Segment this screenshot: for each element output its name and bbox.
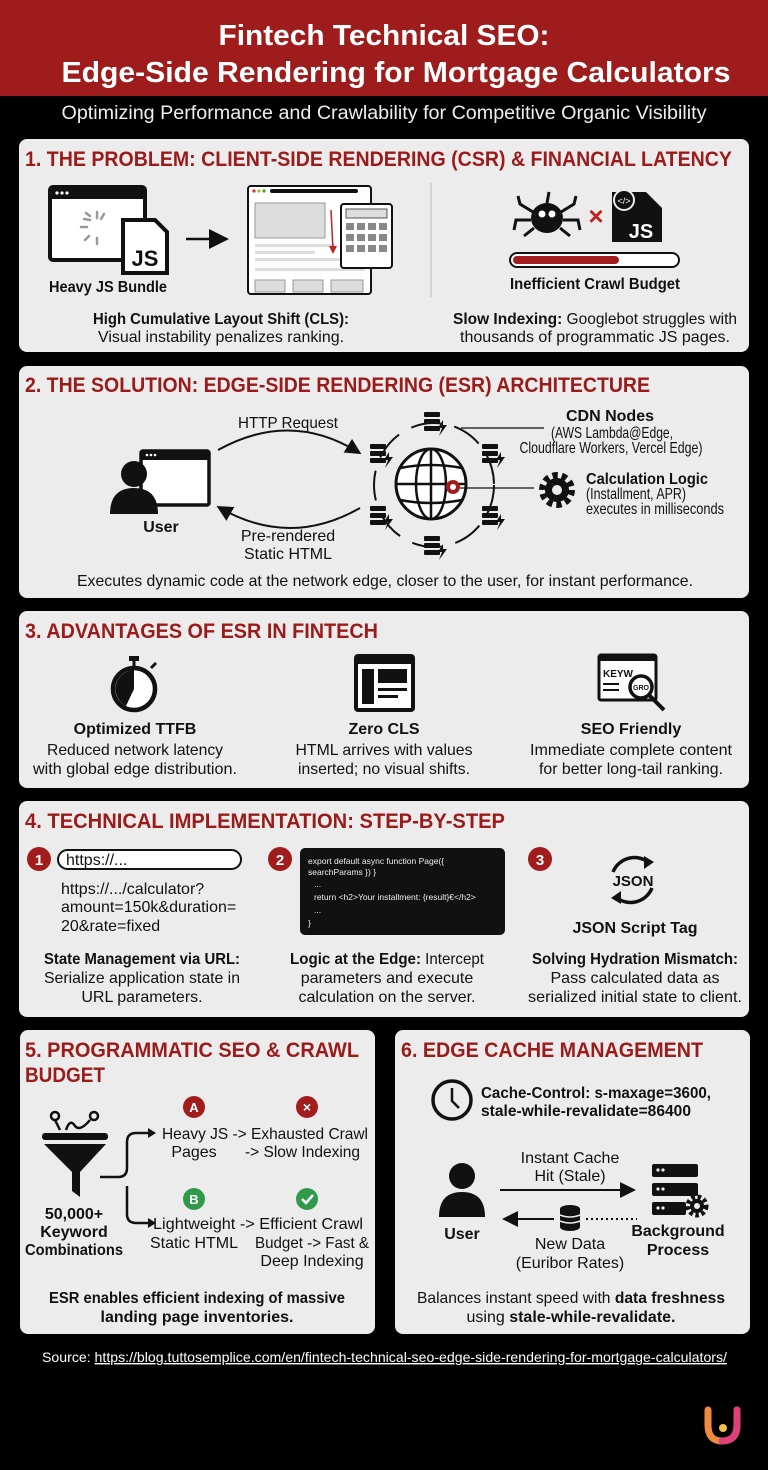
path a: -> Slow Indexing bbox=[245, 1144, 360, 1161]
advantage: ttfb: Reduced network latency bbox=[47, 742, 223, 759]
icon: spider x js: JS bbox=[629, 221, 653, 243]
caption 5: ESR enables efficient indexing of massive bbox=[49, 1290, 345, 1307]
caption 5: landing page inventories. bbox=[101, 1309, 293, 1326]
step 3: JSON Script Tag bbox=[572, 920, 698, 937]
panel: advantages bbox=[19, 611, 749, 788]
caption: solution: Executes dynamic code at the network edge, closer to the user, for instant performance. bbox=[77, 573, 693, 590]
cache-control header: stale-while-revalidate=86400 bbox=[481, 1103, 691, 1120]
title: Edge-Side Rendering for Mortgage Calculators bbox=[62, 57, 730, 89]
subtitle: Optimizing Performance and Crawlability for Competitive Organic Visibility bbox=[62, 103, 707, 124]
advantage: zero cls: HTML arrives with values bbox=[296, 742, 472, 759]
arrow: instant cache hit bbox=[500, 1150, 632, 1190]
title bbox=[62, 20, 730, 89]
caption: CLS bbox=[93, 311, 349, 346]
advantage: seo friendly: Immediate complete content bbox=[530, 742, 733, 759]
arrow: http request: HTTP Request bbox=[238, 415, 339, 432]
step 1 bbox=[27, 847, 241, 1006]
advantage: zero cls: Zero CLS bbox=[348, 721, 420, 738]
panel: programmatic seo bbox=[20, 1030, 375, 1334]
icon: background server: Process bbox=[647, 1242, 709, 1259]
heading 6: 6. EDGE CACHE MANAGEMENT bbox=[401, 1039, 703, 1062]
caption: slow indexing: thousands of programmatic JS pages. bbox=[460, 329, 730, 346]
icon: funnel: 50,000+ bbox=[45, 1206, 103, 1223]
arrow bbox=[186, 238, 224, 240]
icon: user with browser bbox=[110, 451, 209, 536]
icon: seo keyword: GRO bbox=[633, 685, 650, 692]
icon: spider x js: × bbox=[588, 201, 604, 231]
heading 5 bbox=[25, 1039, 359, 1087]
arrow: pre-rendered html: Pre-rendered bbox=[241, 528, 335, 545]
step 2: searchParams }) } bbox=[308, 867, 376, 877]
step 3: JSON bbox=[613, 873, 653, 890]
path b: B bbox=[189, 1192, 199, 1207]
caption 6 bbox=[417, 1290, 725, 1326]
callout: calculation logic: executes in milliseconds bbox=[586, 501, 724, 518]
callout: cdn nodes: (AWS Lambda@Edge, bbox=[551, 425, 673, 442]
caption 5 bbox=[49, 1290, 345, 1326]
icon: background server: Background bbox=[631, 1223, 725, 1240]
step 1: State Management via URL: bbox=[44, 951, 240, 968]
icon: funnel: Combinations bbox=[25, 1242, 123, 1259]
header band bbox=[0, 0, 768, 96]
icon: spider x js: </> bbox=[617, 196, 631, 206]
heading 3: 3. ADVANTAGES OF ESR IN FINTECH bbox=[25, 620, 378, 643]
icon: user bbox=[439, 1163, 485, 1243]
step 3: 3 bbox=[536, 852, 544, 869]
heading 4: 4. TECHNICAL IMPLEMENTATION: STEP-BY-STEP bbox=[25, 810, 505, 833]
branch arrows bbox=[100, 1133, 150, 1223]
arrow: http request bbox=[218, 415, 358, 452]
path b: Deep Indexing bbox=[260, 1253, 364, 1270]
logo bbox=[708, 1410, 737, 1441]
step 3: serialized initial state to client. bbox=[528, 989, 742, 1006]
caption: slow indexing bbox=[453, 311, 737, 346]
step 2: return <h2>Your installment: {result}€</h2> bbox=[314, 892, 476, 902]
arrow: instant cache hit: Hit (Stale) bbox=[534, 1168, 606, 1185]
advantage: seo friendly: SEO Friendly bbox=[581, 721, 681, 738]
path a: Pages bbox=[171, 1144, 217, 1161]
step 2 bbox=[268, 847, 505, 1006]
arrow: new data: New Data bbox=[535, 1236, 605, 1253]
icon: heavy js bundle bbox=[49, 187, 167, 296]
advantage: zero cls bbox=[296, 721, 472, 778]
arrow: pre-rendered html bbox=[220, 508, 360, 563]
icon: seo keyword: KEYW bbox=[603, 669, 634, 680]
arrow: new data: (Euribor Rates) bbox=[516, 1255, 624, 1272]
step 2: Logic at the Edge: Intercept bbox=[290, 951, 485, 968]
step 2: calculation on the server. bbox=[298, 989, 476, 1006]
panel: solution bbox=[19, 366, 749, 598]
arrow: instant cache hit: Instant Cache bbox=[521, 1150, 619, 1167]
step 3 bbox=[528, 847, 742, 1006]
icon: seo keyword bbox=[599, 655, 664, 710]
advantage: seo friendly: for better long-tail ranking. bbox=[539, 761, 723, 778]
path b: Lightweight -> Efficient Crawl bbox=[153, 1216, 363, 1233]
callout: cdn nodes bbox=[461, 408, 702, 457]
step 2: ... bbox=[314, 905, 321, 915]
arrow: pre-rendered html: Static HTML bbox=[244, 546, 332, 563]
icon: zero cls page bbox=[356, 656, 413, 710]
callout: calculation logic bbox=[460, 471, 724, 518]
step 1: https://.../calculator? bbox=[61, 881, 204, 898]
globe with cdn ring bbox=[370, 412, 505, 560]
step 2: 2 bbox=[276, 852, 284, 869]
path a: Heavy JS -> Exhausted Crawl bbox=[162, 1126, 368, 1143]
advantage: zero cls: inserted; no visual shifts. bbox=[298, 761, 470, 778]
path b: Static HTML bbox=[150, 1235, 238, 1252]
icon: layout shift browser bbox=[248, 186, 392, 294]
icon: funnel bbox=[25, 1112, 123, 1259]
advantage: ttfb: with global edge distribution. bbox=[32, 761, 237, 778]
icon: user with browser: User bbox=[143, 519, 179, 536]
panel: problem bbox=[19, 139, 749, 352]
step 2: export default async function Page({ bbox=[308, 856, 444, 866]
callout: calculation logic: (Installment, APR) bbox=[586, 486, 686, 503]
step 1: Serialize application state in bbox=[44, 970, 240, 987]
step 2: parameters and execute bbox=[301, 970, 473, 987]
cache-control header: Cache-Control: s-maxage=3600, bbox=[481, 1085, 711, 1102]
title: Fintech Technical SEO: bbox=[218, 20, 550, 52]
path b bbox=[150, 1188, 369, 1270]
crawl budget bar: Inefficient Crawl Budget bbox=[510, 276, 681, 293]
caption 6: Balances instant speed with data freshness bbox=[417, 1290, 725, 1307]
path a: × bbox=[303, 1099, 311, 1115]
icon: spider x js bbox=[514, 190, 662, 243]
callout: cdn nodes: Cloudflare Workers, Vercel Edge) bbox=[520, 440, 702, 457]
panel: edge cache bbox=[395, 1030, 750, 1334]
step 1: amount=150k&duration= bbox=[61, 899, 236, 916]
source: Source: https://blog.tuttosemplice.com/en/fintech-technical-seo-edge-side-rendering-for-mortgage-calculators/ bbox=[42, 1349, 727, 1365]
cache-control header bbox=[433, 1081, 711, 1120]
heading 5: 5. PROGRAMMATIC SEO & CRAWL bbox=[25, 1039, 359, 1062]
path a: A bbox=[189, 1100, 199, 1115]
callout: cdn nodes: CDN Nodes bbox=[566, 408, 654, 425]
path b: Budget -> Fast & bbox=[255, 1235, 369, 1252]
heading 1: 1. THE PROBLEM: CLIENT-SIDE RENDERING (CSR) & FINANCIAL LATENCY bbox=[25, 148, 732, 171]
crawl budget bar bbox=[510, 253, 681, 293]
icon: stopwatch bbox=[113, 656, 156, 710]
caption 6: using stale-while-revalidate. bbox=[466, 1309, 676, 1326]
step 1: 20&rate=fixed bbox=[61, 918, 160, 935]
step 2: } bbox=[308, 918, 311, 928]
step 3: Pass calculated data as bbox=[550, 970, 720, 987]
arrow: new data bbox=[506, 1205, 637, 1272]
advantage: seo friendly bbox=[530, 721, 733, 778]
step 1: URL parameters. bbox=[81, 989, 203, 1006]
path a bbox=[162, 1096, 368, 1161]
step 3: Solving Hydration Mismatch: bbox=[532, 951, 738, 968]
icon: funnel: Keyword bbox=[40, 1224, 108, 1241]
step 1: 1 bbox=[35, 852, 43, 869]
icon: heavy js bundle: JS bbox=[132, 246, 158, 271]
caption: slow indexing: Slow Indexing: Googlebot struggles with bbox=[453, 311, 737, 328]
caption: CLS: High Cumulative Layout Shift (CLS): bbox=[93, 311, 349, 328]
heading 2: 2. THE SOLUTION: EDGE-SIDE RENDERING (ESR) ARCHITECTURE bbox=[25, 374, 650, 397]
advantage: ttfb: Optimized TTFB bbox=[74, 721, 196, 738]
caption: CLS: Visual instability penalizes ranking. bbox=[98, 329, 344, 346]
heading 5: BUDGET bbox=[25, 1064, 105, 1087]
icon: user: User bbox=[444, 1226, 480, 1243]
step 2: ... bbox=[314, 879, 321, 889]
panel: implementation bbox=[19, 801, 749, 1017]
icon: heavy js bundle: Heavy JS Bundle bbox=[49, 279, 167, 296]
step 1: https://... bbox=[66, 852, 127, 869]
advantage: ttfb bbox=[32, 721, 237, 778]
icon: background server bbox=[631, 1164, 725, 1259]
callout: calculation logic: Calculation Logic bbox=[586, 471, 708, 488]
